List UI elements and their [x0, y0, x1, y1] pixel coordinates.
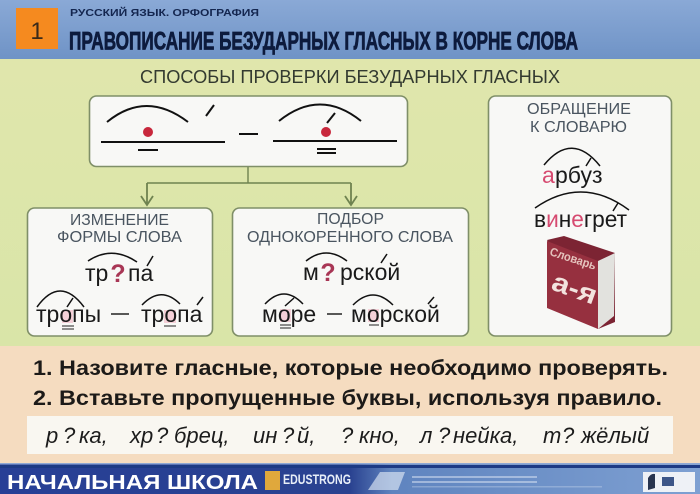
practice words strip: кно,: [359, 423, 400, 448]
panel: dictionary reference: [488, 96, 672, 336]
practice words strip: нейка,: [453, 423, 518, 448]
number badge: [16, 8, 58, 49]
panel: scheme of checking: [90, 96, 408, 166]
heading: ПОДБОР: [317, 211, 384, 228]
icon: dictionary book: а-я: [548, 266, 601, 310]
icon: publisher logo: [265, 471, 280, 490]
footer band: [0, 463, 700, 494]
example pair: [36, 291, 203, 329]
practice words strip: ка,: [79, 423, 108, 448]
heading: ИЗМЕНЕНИЕ: [70, 212, 169, 229]
panel: dictionary reference: К СЛОВАРЮ: [530, 119, 627, 136]
practice words strip: ?: [438, 423, 451, 448]
practice words strip: т: [543, 423, 561, 448]
word: arbuz: а: [542, 162, 555, 188]
word with gap: [85, 253, 153, 288]
practice words strip: ?: [282, 423, 295, 448]
example pair: морской: [351, 301, 440, 327]
header band: [0, 0, 700, 59]
subject label: РУССКИЙ ЯЗЫК. ОРФОГРАФИЯ: [70, 6, 259, 19]
icon: dictionary book: [547, 236, 615, 329]
scheme: unstressed word: [101, 105, 225, 150]
arrows from scheme to methods: [141, 167, 357, 205]
practice words strip: ?: [341, 423, 354, 448]
publisher imprint: [368, 472, 602, 490]
task one: 1. Назовите гласные, которые необходимо проверять.: [33, 357, 668, 380]
word: vinegret: [534, 192, 629, 232]
panel: cognate word selection: ОДНОКОРЕННОГО СЛОВА: [247, 229, 454, 246]
publisher name: EDUSTRONG: [283, 471, 351, 487]
practice words strip: брец,: [174, 423, 230, 448]
practice words strip: ?: [156, 423, 169, 448]
practice words strip: хр: [129, 423, 153, 448]
green background panel: [0, 59, 700, 346]
section heading: СПОСОБЫ ПРОВЕРКИ БЕЗУДАРНЫХ ГЛАСНЫХ: [140, 67, 560, 87]
example pair: [262, 294, 440, 328]
panel: exercise: [0, 346, 700, 463]
panel: cognate word selection: [232, 208, 468, 336]
panel: change of word form: ФОРМЫ СЛОВА: [57, 229, 183, 246]
panel: change of word form: [28, 208, 212, 336]
scheme: dash: [239, 133, 258, 135]
scheme: stressed word: [273, 104, 397, 153]
practice words strip: жёлый: [580, 423, 649, 448]
word with gap: ?: [110, 260, 126, 288]
word with gap: па: [128, 260, 153, 286]
heading: ОБРАЩЕНИЕ: [527, 101, 631, 118]
task two: 2. Вставьте пропущенные буквы, используя правило.: [33, 387, 662, 410]
practice words strip: [27, 416, 673, 454]
icon: dictionary book: Словарь: [548, 245, 598, 273]
example pair: тропа: [141, 301, 203, 327]
icon: publisher mark: [643, 472, 695, 492]
word: vinegret: винегрет: [534, 206, 627, 232]
practice words strip: ?: [562, 423, 575, 448]
practice words strip: й,: [297, 423, 315, 448]
word with gap: [303, 253, 400, 287]
practice words strip: р: [45, 423, 58, 448]
practice words strip: ?: [63, 423, 76, 448]
example pair: море: [262, 301, 316, 327]
word with gap: м: [303, 259, 319, 285]
word: arbuz: [542, 148, 603, 188]
example pair: тропы: [36, 301, 101, 327]
practice words strip: л: [418, 423, 432, 448]
word: arbuz: рбуз: [555, 162, 603, 188]
practice words strip: ин: [253, 423, 277, 448]
number badge: 1: [30, 18, 44, 45]
word with gap: тр: [85, 260, 108, 286]
series name: НАЧАЛЬНАЯ ШКОЛА: [7, 472, 258, 494]
word with gap: рской: [340, 259, 400, 285]
word with gap: ?: [320, 259, 336, 287]
